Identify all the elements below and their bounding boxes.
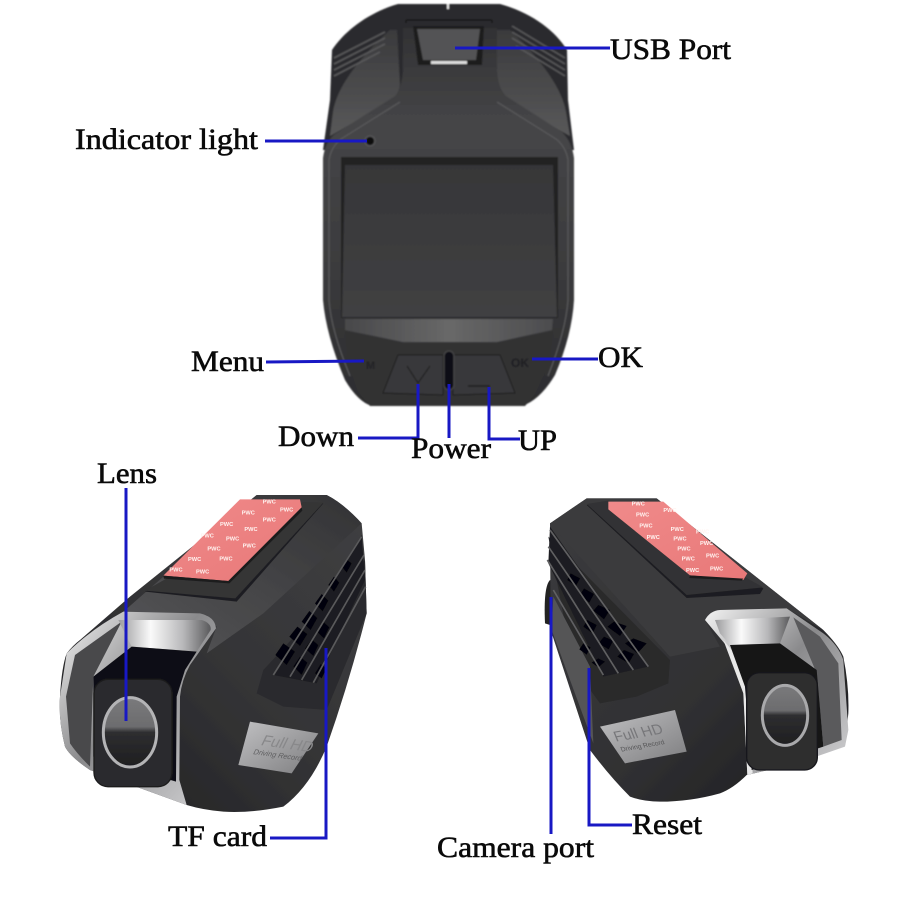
callout: Power: Power bbox=[411, 432, 491, 465]
up button bbox=[453, 355, 515, 395]
full hd badge: Driving Record bbox=[620, 739, 666, 754]
pad print: PWC bbox=[226, 537, 239, 543]
face bevel bbox=[329, 102, 568, 376]
callout: TF card: TF card bbox=[168, 820, 267, 853]
pad print: PWC bbox=[243, 544, 256, 550]
usb port bbox=[406, 20, 492, 65]
pad print: PWC bbox=[686, 568, 699, 574]
lens bbox=[762, 685, 808, 745]
full hd badge: Full HD bbox=[611, 722, 666, 745]
lens housing bbox=[747, 673, 817, 770]
chrome visor bbox=[715, 617, 790, 645]
pad print: PWC bbox=[242, 511, 255, 517]
callout: Menu: Menu bbox=[191, 345, 264, 378]
ok mark: OK bbox=[511, 356, 529, 370]
right side panel bbox=[497, 30, 570, 136]
chrome visor bbox=[118, 620, 211, 652]
pad print: PWC bbox=[706, 553, 719, 559]
pad print: PWC bbox=[696, 529, 709, 535]
pad print: PWC bbox=[673, 537, 687, 543]
pad print: PWC bbox=[647, 535, 660, 541]
pad print: PWC bbox=[169, 567, 183, 573]
callout: Indicator light: Indicator light bbox=[75, 123, 259, 156]
full hd badge bbox=[600, 710, 687, 763]
callout: Reset bbox=[589, 668, 703, 841]
pad print: PWC bbox=[682, 557, 695, 563]
pad print: PWC bbox=[220, 522, 233, 528]
down button bbox=[383, 355, 443, 395]
callout: UP: UP bbox=[518, 424, 557, 457]
full hd badge bbox=[238, 722, 318, 773]
lens bbox=[103, 698, 157, 767]
side shade bbox=[548, 537, 670, 703]
callout: USB Port: USB Port bbox=[610, 33, 732, 66]
vents bbox=[273, 535, 366, 683]
top face bbox=[123, 495, 362, 653]
device: front view of dash camera bbox=[323, 4, 574, 406]
lens housing bbox=[94, 679, 172, 787]
callout: TF card bbox=[168, 648, 326, 853]
device: left three-quarter view bbox=[60, 495, 367, 812]
callout: Camera port: Camera port bbox=[437, 831, 595, 864]
callout: UP bbox=[489, 387, 557, 457]
power button bbox=[444, 351, 454, 390]
callout: Down: Down bbox=[278, 420, 354, 453]
lens cavity bbox=[730, 643, 823, 770]
pad print: PWC bbox=[263, 517, 276, 523]
full hd badge: Driving Record bbox=[252, 748, 304, 763]
button panel bbox=[345, 331, 553, 406]
indicator light bbox=[365, 136, 375, 146]
lower side highlight bbox=[552, 597, 593, 743]
pad print: PWC bbox=[636, 513, 649, 519]
mounting plate bbox=[145, 503, 323, 602]
pad print: PWC bbox=[219, 557, 233, 563]
pad print: PWC bbox=[196, 569, 209, 575]
chrome arch bbox=[705, 608, 848, 775]
callout: Reset: Reset bbox=[632, 808, 703, 841]
callout: Lens: Lens bbox=[97, 457, 157, 490]
pad print: PWC bbox=[201, 533, 214, 539]
callout: Down bbox=[278, 384, 418, 453]
lens cavity bbox=[93, 647, 197, 782]
side shade bbox=[257, 560, 367, 710]
device: right three-quarter view bbox=[545, 498, 848, 802]
pad print: PWC bbox=[263, 499, 276, 505]
full hd badge: Full HD bbox=[258, 733, 316, 756]
pad print bbox=[632, 501, 723, 574]
adhesive pad bbox=[608, 502, 747, 580]
pad print: PWC bbox=[244, 527, 258, 533]
callout: OK bbox=[532, 341, 643, 374]
pad print: PWC bbox=[663, 508, 677, 514]
pad print: PWC bbox=[207, 547, 221, 553]
left side panel bbox=[330, 30, 400, 136]
callout: Power bbox=[411, 384, 491, 465]
pad print: PWC bbox=[671, 527, 684, 533]
top face bbox=[550, 498, 823, 657]
screen bbox=[341, 157, 558, 318]
pad print: PWC bbox=[700, 541, 713, 547]
vents bbox=[547, 527, 648, 677]
menu mark: M bbox=[366, 360, 375, 372]
mounting plate bbox=[587, 502, 763, 598]
body bbox=[550, 498, 848, 802]
pad print: PWC bbox=[188, 557, 201, 563]
pad print: PWC bbox=[632, 501, 645, 507]
camera face bbox=[323, 28, 574, 406]
body bbox=[60, 495, 367, 812]
top notch bbox=[447, 4, 449, 9]
camera port bump bbox=[545, 580, 560, 627]
adhesive pad bbox=[163, 499, 302, 581]
rear shell with cooling ridges bbox=[323, 4, 574, 150]
pad print: PWC bbox=[280, 507, 293, 513]
callout: OK: OK bbox=[598, 341, 643, 374]
lower strip bbox=[345, 319, 553, 342]
chrome arch bbox=[60, 612, 216, 805]
pad print bbox=[169, 499, 293, 575]
pad print: PWC bbox=[639, 524, 653, 530]
vent ridges bbox=[334, 26, 565, 76]
pad print: PWC bbox=[710, 567, 723, 573]
pad print: PWC bbox=[677, 547, 691, 553]
